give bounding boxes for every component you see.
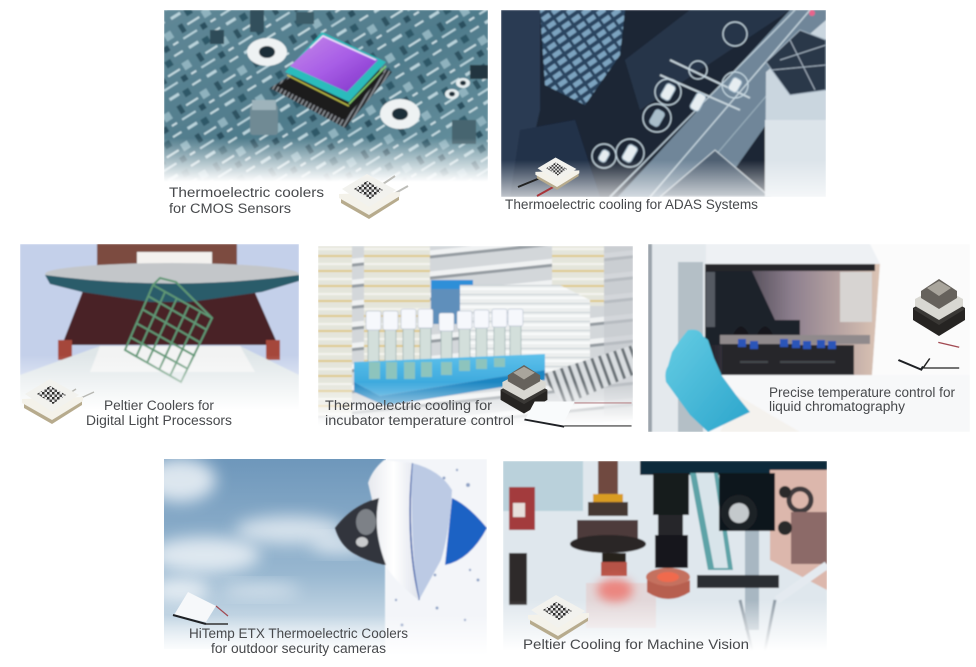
- white housing: [368, 460, 419, 600]
- lens dome: [335, 498, 386, 565]
- panel: machine vision: [503, 461, 827, 652]
- glove: [665, 330, 750, 432]
- blue rack: [354, 354, 545, 396]
- grey side panel: [412, 463, 452, 600]
- icon: cooler plate with wires: [173, 592, 228, 624]
- cars and rings: [598, 76, 743, 163]
- photo: incubator with tubes and culture plates: [318, 246, 633, 426]
- icon: thermoelectric cooler tile: [339, 174, 408, 219]
- icon: thermoelectric cooler tile with wires: [518, 157, 579, 196]
- white mounting holes: [247, 38, 287, 66]
- ring light: [646, 568, 690, 586]
- sleeve: [722, 397, 796, 432]
- main lens: [598, 461, 618, 495]
- photo: circuit board with image sensor: [164, 10, 488, 182]
- caption: [189, 626, 408, 656]
- photo: dome camera against sky: [164, 459, 487, 646]
- panel: digital light processors: [20, 244, 299, 428]
- caption: incubator temperature control: [325, 413, 514, 428]
- left red box and dark part: [509, 487, 535, 530]
- third camera on pole: [745, 525, 759, 630]
- photo: 3D printer with lattice part: [20, 244, 299, 410]
- caption: Thermoelectric cooling for: [325, 398, 493, 413]
- vial trays: [722, 345, 854, 375]
- tubes: [367, 326, 522, 362]
- wire shelf: [540, 345, 633, 405]
- caption: [769, 385, 955, 414]
- caption: [86, 398, 232, 428]
- caption: Peltier Cooling for Machine Vision: [523, 636, 749, 652]
- caption: [169, 185, 324, 216]
- icon: thermoelectric cooler tile: [22, 379, 94, 424]
- caption: [325, 398, 514, 428]
- panel: incubator temperature control: [318, 246, 633, 428]
- caption: Thermoelectric cooling for ADAS Systems: [505, 197, 758, 212]
- caption: Digital Light Processors: [86, 413, 232, 428]
- panel: CMOS sensors: [164, 10, 488, 219]
- caption: for CMOS Sensors: [169, 201, 291, 216]
- caption: liquid chromatography: [769, 399, 905, 414]
- icon: cooler plate with wires: [898, 336, 959, 370]
- lattice cube: [125, 278, 212, 382]
- blue dome back: [445, 498, 487, 565]
- chip: [270, 67, 392, 128]
- caption: Peltier Coolers for: [104, 398, 215, 413]
- icon: cooler plate with wires: [524, 401, 632, 427]
- icon: heat sink assembly: [913, 279, 965, 336]
- blue vial caps: [430, 288, 461, 325]
- panel: ADAS systems: [501, 10, 826, 212]
- photo: chromatography instrument with gloved hand: [648, 244, 881, 432]
- photo: machine vision inspection rig: [503, 461, 827, 651]
- second camera: [690, 473, 733, 570]
- caption: HiTemp ETX Thermoelectric Coolers: [189, 626, 408, 641]
- icon: thermoelectric cooler tile: [528, 595, 589, 640]
- instrument interior: [705, 264, 880, 375]
- photo: city street with sensing cars: [501, 10, 826, 197]
- icon: heat sink assembly: [501, 365, 547, 414]
- stacked plates: [460, 285, 590, 375]
- caption: Thermoelectric coolers: [169, 185, 324, 200]
- caption: Precise temperature control for: [769, 385, 955, 400]
- panel: outdoor security cameras: [144, 458, 487, 656]
- caption: for outdoor security cameras: [211, 641, 386, 656]
- right tower: [764, 20, 826, 121]
- panel: liquid chromatography: [648, 244, 970, 432]
